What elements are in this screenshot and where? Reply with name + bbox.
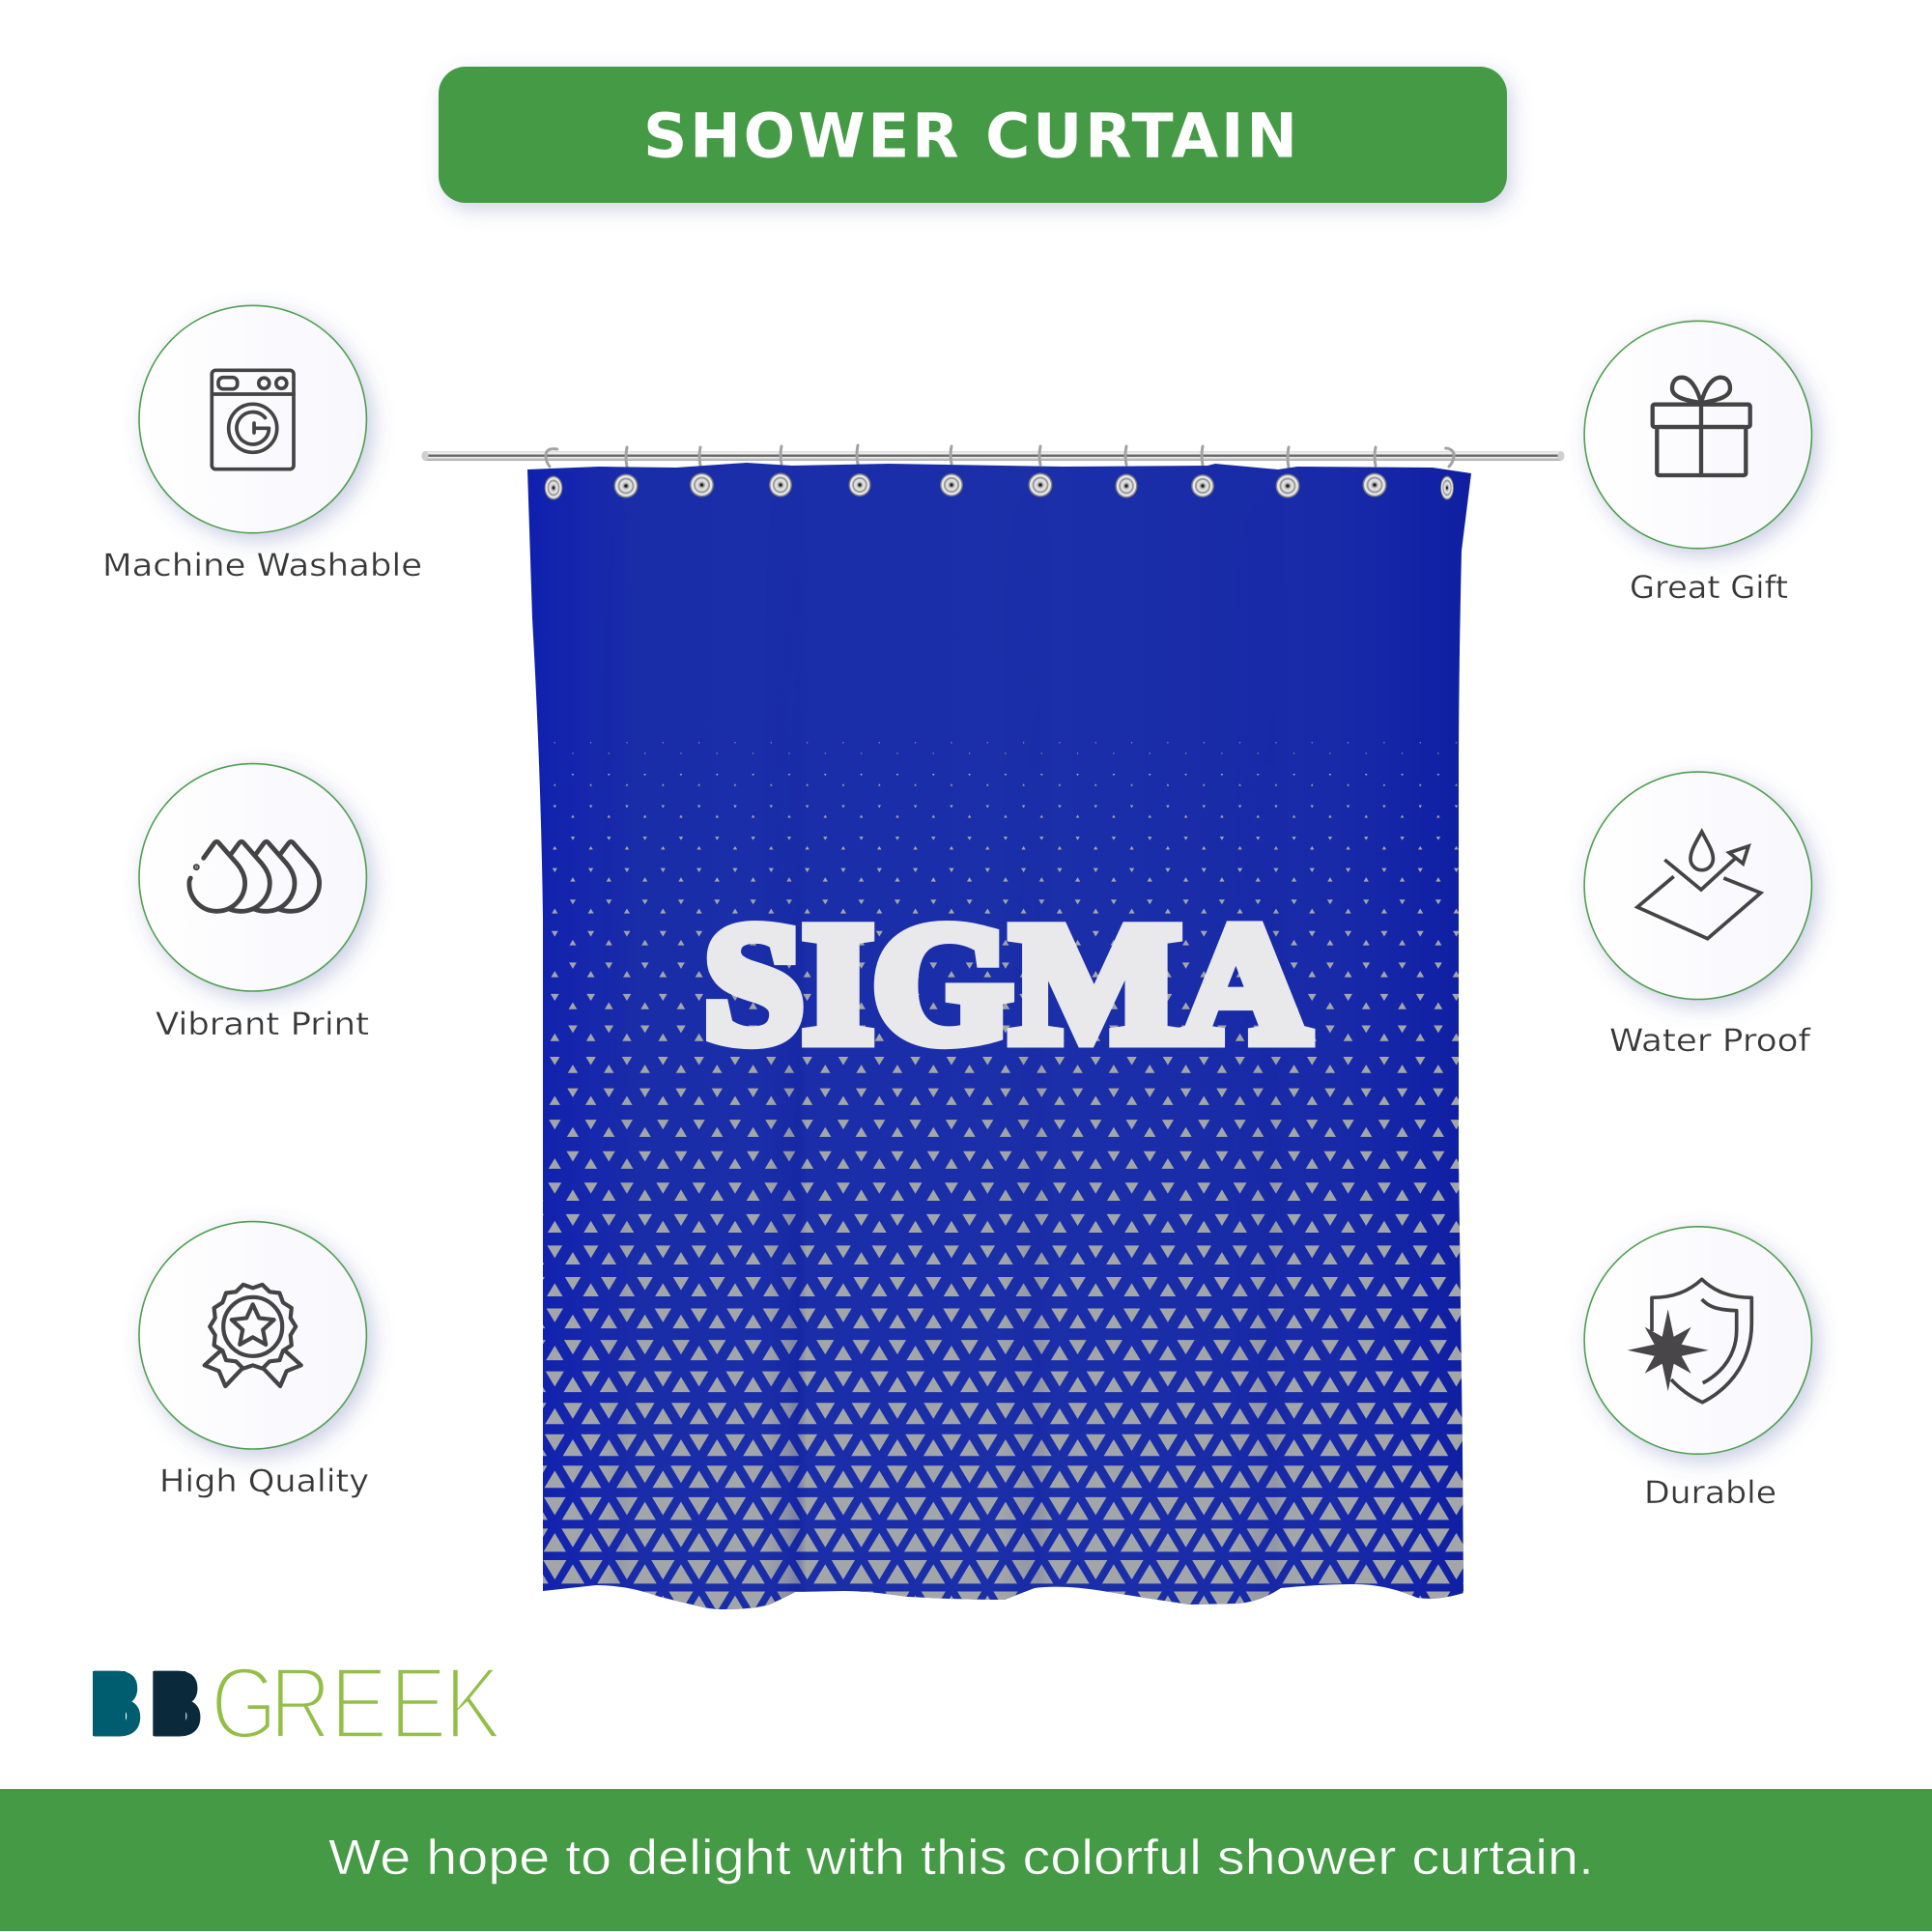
feature: vibrant print	[139, 764, 369, 1042]
feature: water proof	[1584, 772, 1812, 1059]
icon: shield with impact star	[1628, 1279, 1751, 1403]
icon: washing machine	[212, 370, 294, 469]
label: Durable	[1644, 1474, 1776, 1511]
label: Water Proof	[1609, 1022, 1811, 1059]
curtain	[519, 459, 1511, 1623]
curtain hooks	[546, 445, 1454, 468]
label: Vibrant Print	[156, 1006, 369, 1042]
feature: machine washable	[102, 305, 422, 583]
icon: award rosette	[205, 1285, 301, 1386]
curtain wordmark: SIGMA	[704, 890, 1309, 1078]
icon: water repellent sheet	[1637, 832, 1761, 939]
label: Machine Washable	[102, 547, 422, 583]
footer band	[0, 1789, 1932, 1931]
fabric and triangle pattern	[519, 459, 1511, 1623]
feature: high quality	[139, 1222, 369, 1499]
feature: durable	[1584, 1227, 1812, 1511]
footer text: We hope to delight with this colorful shower curtain.	[328, 1830, 1594, 1885]
logo mark: BB	[90, 1653, 202, 1753]
icon: ink drops	[189, 841, 320, 911]
label: High Quality	[159, 1463, 369, 1499]
logo mark: BB: B	[90, 1653, 142, 1753]
title text: SHOWER CURTAIN	[643, 100, 1297, 172]
logo mark: BB: B	[150, 1653, 202, 1753]
title banner	[439, 67, 1507, 203]
label: Great Gift	[1630, 569, 1788, 606]
feature: great gift	[1584, 321, 1812, 606]
logo wordmark: GREEK: GREEK	[211, 1645, 501, 1760]
curtain rod	[421, 451, 1565, 461]
grommets	[545, 473, 1454, 500]
icon: gift box	[1653, 378, 1750, 475]
logo	[90, 1645, 501, 1760]
